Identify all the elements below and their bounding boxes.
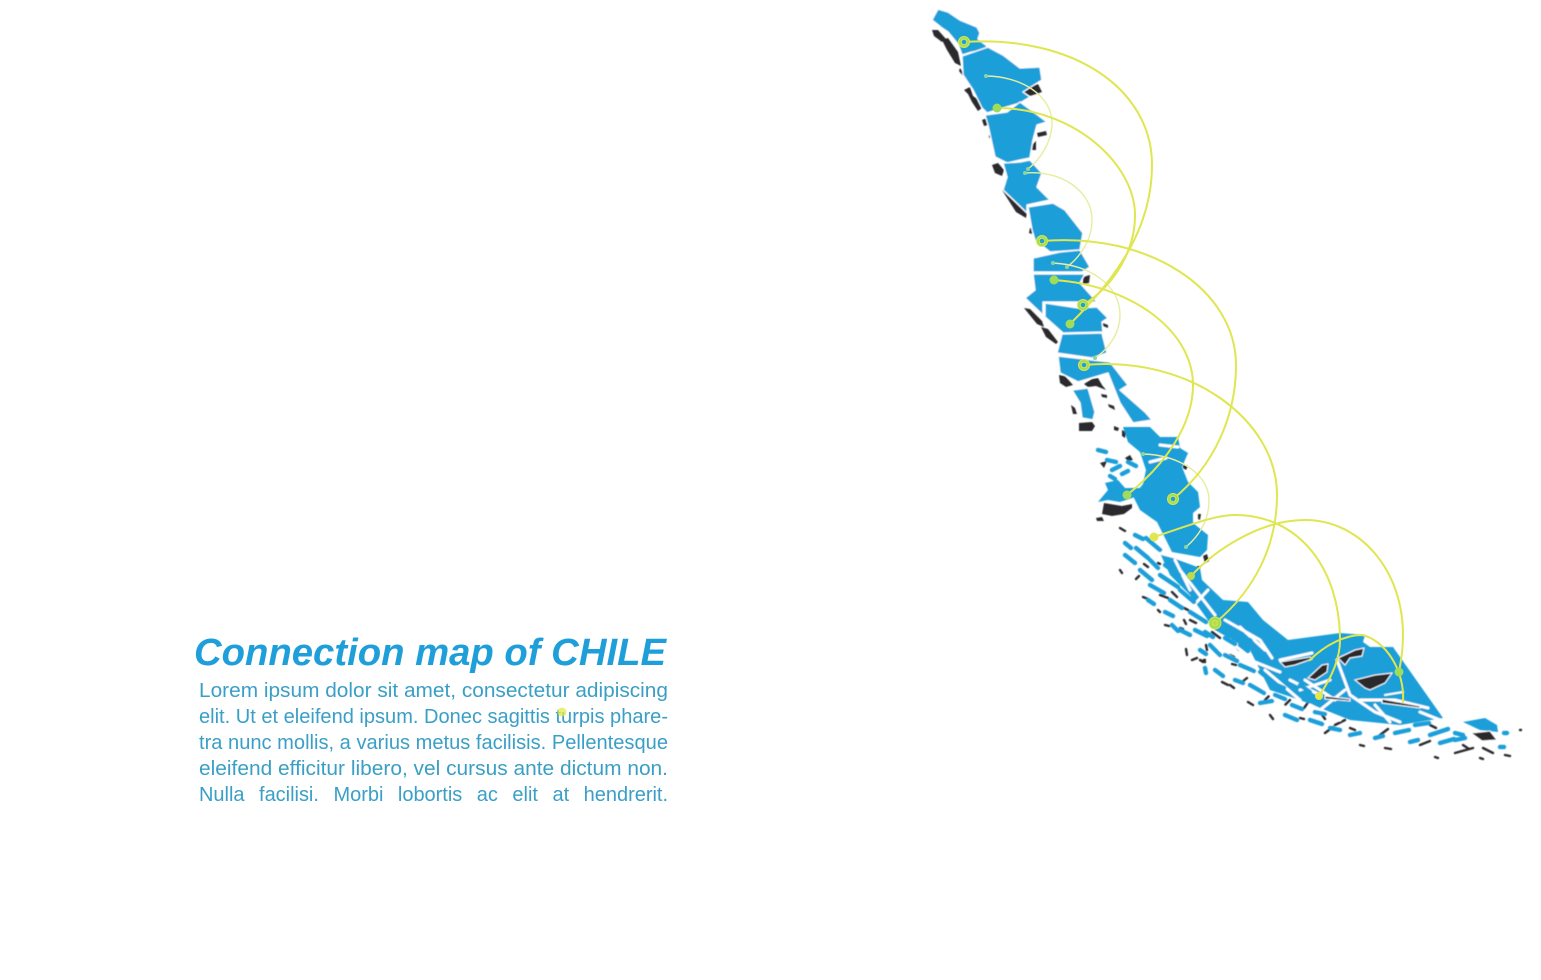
body text: Lorem ipsum dolor sit amet, consectetur adipiscing (199, 680, 668, 702)
body text: Nulla facilisi. Morbi lobortis ac elit at hendrerit. (199, 784, 668, 806)
connection arcs (964, 41, 1403, 702)
connection nodes (958, 36, 1404, 700)
map of Chile (932, 9, 1521, 759)
fjord inlets (1150, 445, 1440, 722)
body text (199, 680, 668, 806)
central and southern mainland (1098, 427, 1498, 732)
coastal blue fragments (1098, 450, 1507, 747)
body text: tra nunc mollis, a varius metus facilisis. Pellentesque (199, 732, 668, 754)
small nodes (984, 74, 1188, 549)
fine black fragments (1120, 495, 1521, 759)
stray yellow dot (558, 708, 566, 716)
large ring nodes (958, 36, 1221, 629)
northern regions (932, 9, 1152, 423)
title: Connection map of CHILE (194, 632, 668, 674)
thin pale arcs (986, 76, 1209, 547)
main yellow arcs (964, 41, 1403, 702)
southern black islands (1280, 648, 1497, 741)
medium nodes (992, 104, 1404, 700)
body text: eleifend efficitur libero, vel cursus ante dictum non. (199, 758, 668, 780)
body text: elit. Ut et eleifend ipsum. Donec sagittis turpis phare- (199, 706, 668, 728)
map shadow islands (932, 30, 1209, 572)
